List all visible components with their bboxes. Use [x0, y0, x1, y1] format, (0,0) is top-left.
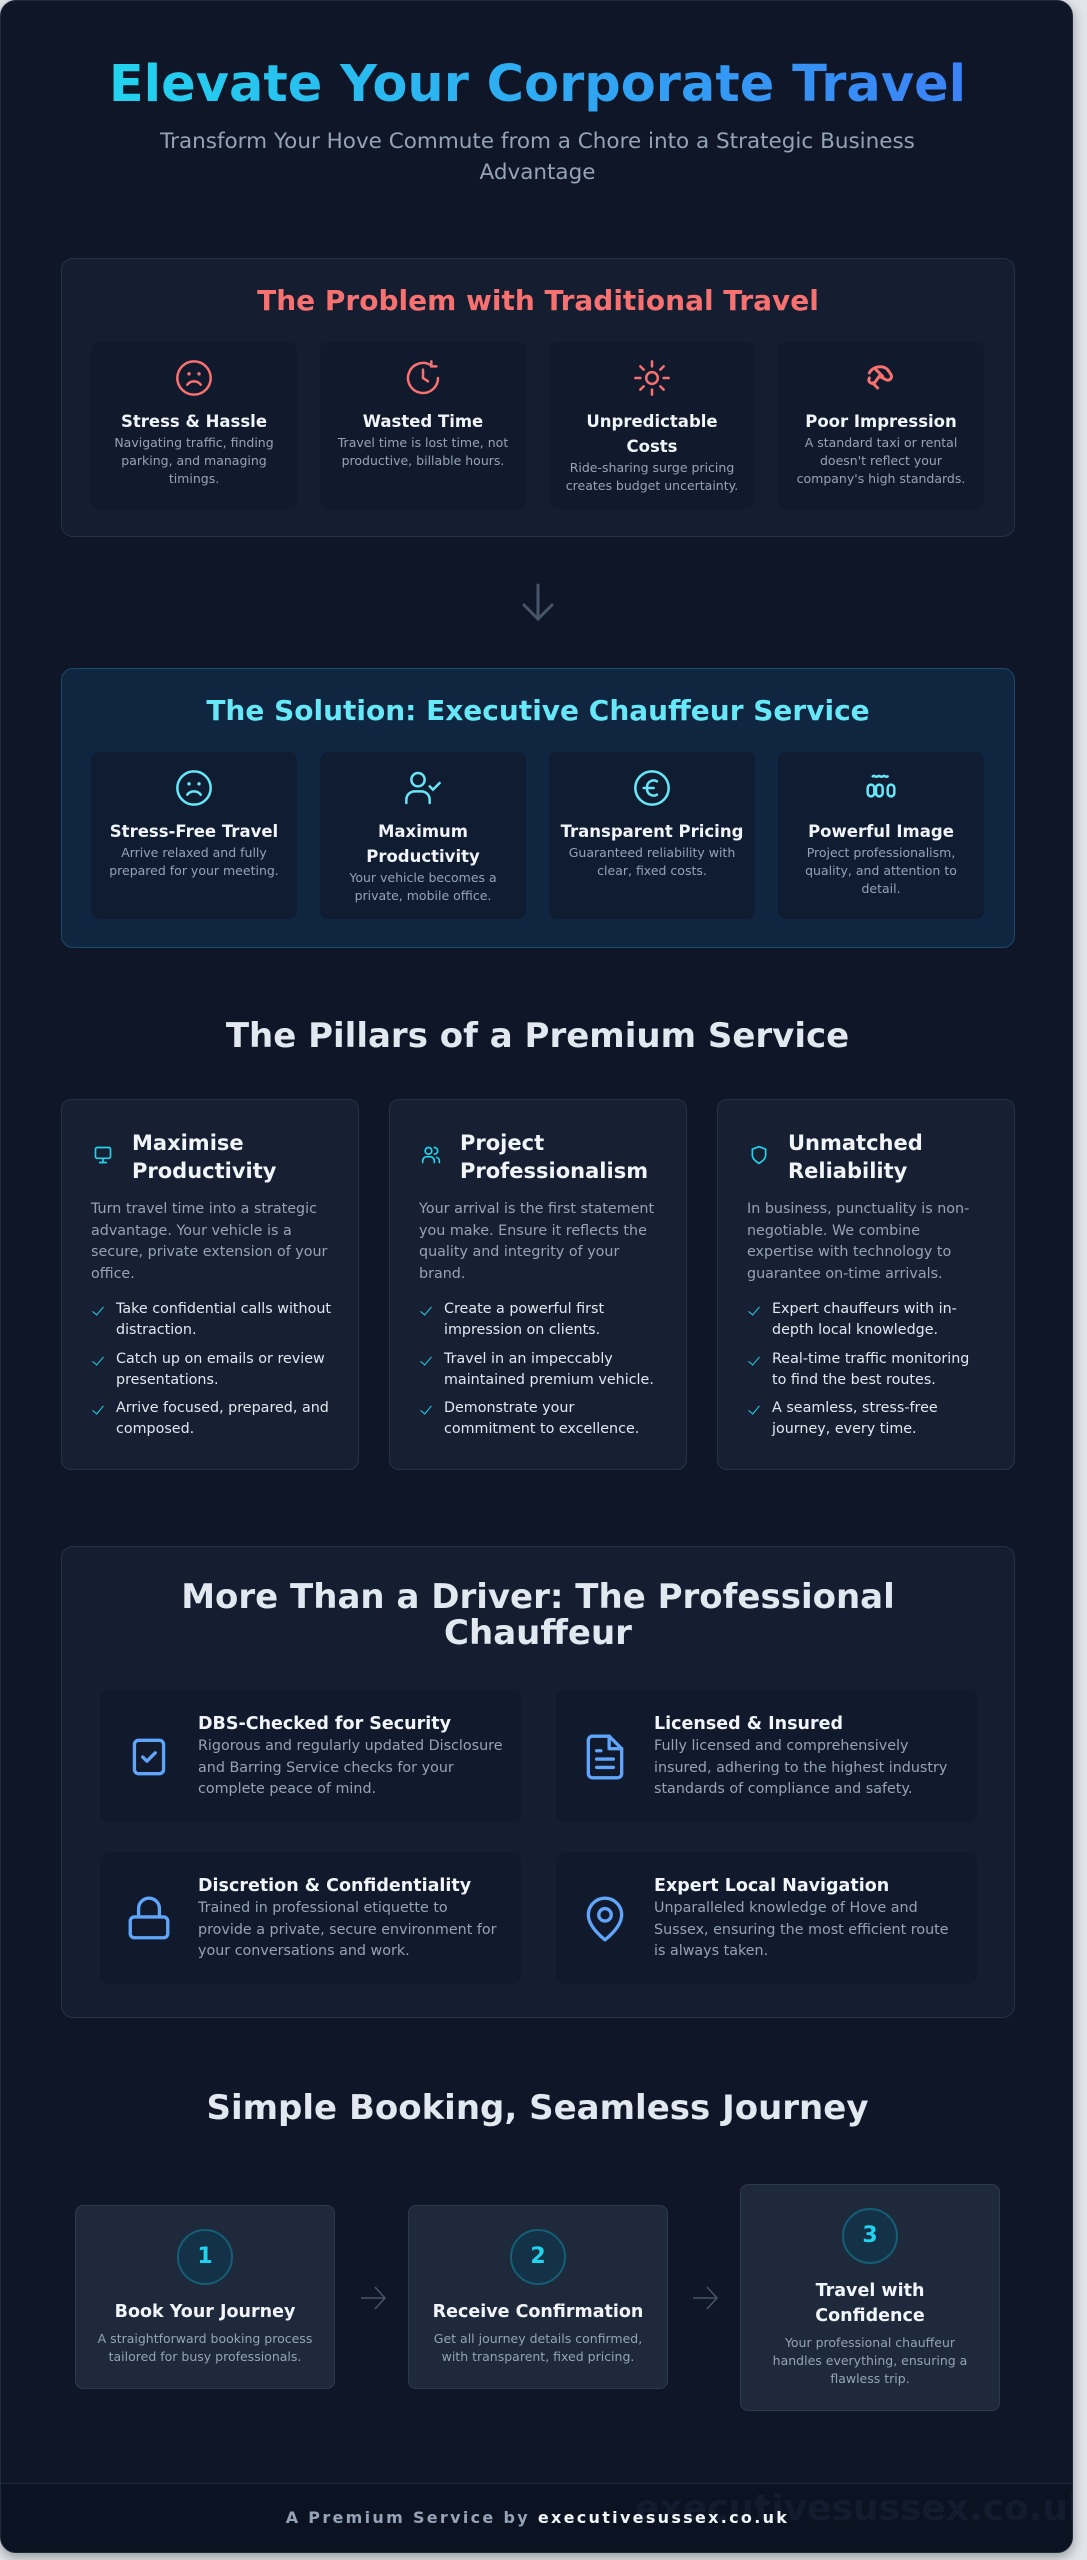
item: discretion: provide a private, secure environment for [198, 1922, 497, 1938]
step 3: Your professional chauffeur handles everything, ensuring a flawless trip. [773, 2335, 967, 2386]
card: productivity: Productivity [366, 847, 480, 866]
pillar: productivity [61, 1099, 359, 1470]
card: wasted time: Travel time is lost time, not productive, billable hours. [338, 435, 508, 468]
card: stress: Stress & Hassle [121, 412, 267, 431]
item: DBS: and Barring Service checks for your [198, 1760, 454, 1776]
card: pricing: Transparent Pricing [561, 822, 743, 841]
step 3: Travel with [816, 2281, 924, 2301]
item: navigation [556, 1852, 977, 1984]
step 1 [75, 2205, 335, 2389]
card: costs: Ride-sharing surge pricing creates budget uncertainty. [566, 460, 738, 493]
arrow: down [522, 584, 554, 621]
problem heading: The Problem with Traditional Travel [257, 284, 819, 317]
item: DBS [100, 1690, 521, 1822]
item: discretion: Discretion & Confidentiality [198, 1876, 471, 1896]
pillar: professionalism: Travel in an impeccably maintained premium vehicle. [444, 1350, 654, 1388]
step 1: Book Your Journey [115, 2302, 295, 2322]
pillar: productivity: Catch up on emails or review presentations. [116, 1350, 325, 1388]
card: stress: Navigating traffic, finding parking, and managing timings. [114, 435, 274, 486]
panel: chauffeur [61, 1546, 1015, 2018]
card: wasted time [320, 342, 526, 509]
card: impression: Poor Impression [805, 412, 957, 431]
pillar: professionalism: Project Professionalism [460, 1131, 648, 1183]
pillar: reliability: A seamless, stress-free journey, every time. [772, 1400, 938, 1437]
pillar: professionalism: Create a powerful first impression on clients. [444, 1301, 604, 1338]
arrow: step 1 to 2 [361, 2286, 386, 2310]
card: productivity [320, 752, 526, 919]
step 1: A straightforward booking process tailored for busy professionals. [98, 2331, 312, 2364]
step 2 [408, 2205, 668, 2389]
pillar: productivity: Turn travel time into a strategic advantage. Your vehicle is a secure, private extension of your office. [91, 1201, 327, 1282]
step 3 [740, 2184, 1000, 2411]
pillar: reliability: In business, punctuality is non-negotiable. We combine expertise with technology to guarantee on-time arrivals. [747, 1201, 969, 1282]
card: stress [91, 342, 297, 509]
pillar: reliability: Real-time traffic monitoring to find the best routes. [772, 1350, 969, 1388]
card: image: Project professionalism, quality, and attention to detail. [805, 845, 957, 896]
card: pricing: Guaranteed reliability with clear, fixed costs. [569, 845, 735, 878]
solution heading: The Solution: Executive Chauffeur Service [206, 694, 870, 727]
card: costs: Costs [626, 437, 677, 456]
item: licensed: standards of compliance and safety. [654, 1781, 912, 1797]
item: DBS: Rigorous and regularly updated Disclosure [198, 1738, 502, 1754]
card: impression [778, 342, 984, 509]
card: costs [549, 342, 755, 509]
item: navigation: Sussex, ensuring the most efficient route [654, 1922, 949, 1938]
step 3: Confidence [815, 2306, 925, 2326]
footer [1, 2483, 1074, 2554]
heading: booking: Simple Booking, Seamless Journey [206, 2088, 868, 2128]
item: navigation: Unparalleled knowledge of Hove and [654, 1900, 918, 1916]
arrow: step 2 to 3 [693, 2286, 718, 2310]
pillar: productivity: Maximise Productivity [132, 1131, 276, 1183]
subtitle: Transform Your Hove Commute from a Chore into a Strategic Business Advantage [160, 129, 915, 185]
item: DBS: DBS-Checked for Security [198, 1714, 451, 1734]
card: image: Powerful Image [808, 822, 954, 841]
step 2: 2 [530, 2244, 546, 2269]
card: stress-free: Stress-Free Travel [110, 822, 278, 841]
item: discretion: Trained in professional etiquette to [198, 1900, 448, 1916]
item: navigation: is always taken. [654, 1943, 768, 1959]
card: costs: Unpredictable [586, 412, 718, 431]
step 1: 1 [197, 2244, 213, 2269]
step 2: Receive Confirmation [433, 2302, 643, 2322]
card: productivity: Maximum [378, 822, 468, 841]
card: productivity: Your vehicle becomes a private, mobile office. [349, 870, 497, 903]
card: stress-free: Arrive relaxed and fully prepared for your meeting. [109, 845, 279, 878]
card: image [778, 752, 984, 919]
pillar: professionalism: Your arrival is the first statement you make. Ensure it reflects the quality and integrity of your brand. [419, 1201, 654, 1282]
card: impression: A standard taxi or rental doesn't reflect your company's high standards. [797, 435, 965, 486]
item: licensed: Fully licensed and comprehensively [654, 1738, 908, 1754]
pillar: professionalism: Demonstrate your commitment to excellence. [444, 1400, 639, 1437]
panel: solution [61, 668, 1015, 948]
step 3: 3 [862, 2223, 878, 2248]
item: licensed: Licensed & Insured [654, 1714, 843, 1734]
pillar: productivity: Arrive focused, prepared, and composed. [116, 1400, 329, 1437]
step 2: Get all journey details confirmed, with transparent, fixed pricing. [434, 2331, 642, 2364]
title: Elevate Your Corporate Travel [109, 55, 966, 114]
chauffeur heading [181, 1577, 895, 1653]
heading: pillars: The Pillars of a Premium Service [226, 1016, 849, 1056]
item: discretion [100, 1852, 521, 1984]
card: pricing [549, 752, 755, 919]
pillar: reliability [717, 1099, 1015, 1470]
card: stress-free [91, 752, 297, 919]
footer text: A Premium Service by executivesussex.co.uk [286, 2508, 789, 2527]
chauffeur heading: More Than a Driver: The Professional [181, 1577, 895, 1617]
item: licensed [556, 1690, 977, 1822]
pillar: productivity: Take confidential calls without distraction. [116, 1301, 331, 1338]
item: discretion: your conversations and work. [198, 1943, 410, 1959]
pillar: reliability: Expert chauffeurs with in-depth local knowledge. [772, 1301, 957, 1338]
chauffeur heading: Chauffeur [444, 1613, 632, 1653]
item: navigation: Expert Local Navigation [654, 1876, 889, 1896]
panel: problem [61, 258, 1015, 537]
item: licensed: insured, adhering to the highest industry [654, 1760, 947, 1776]
pillar: reliability: Unmatched Reliability [788, 1131, 923, 1183]
card: wasted time: Wasted Time [363, 412, 483, 431]
pillar: professionalism [389, 1099, 687, 1470]
item: DBS: complete peace of mind. [198, 1781, 376, 1797]
